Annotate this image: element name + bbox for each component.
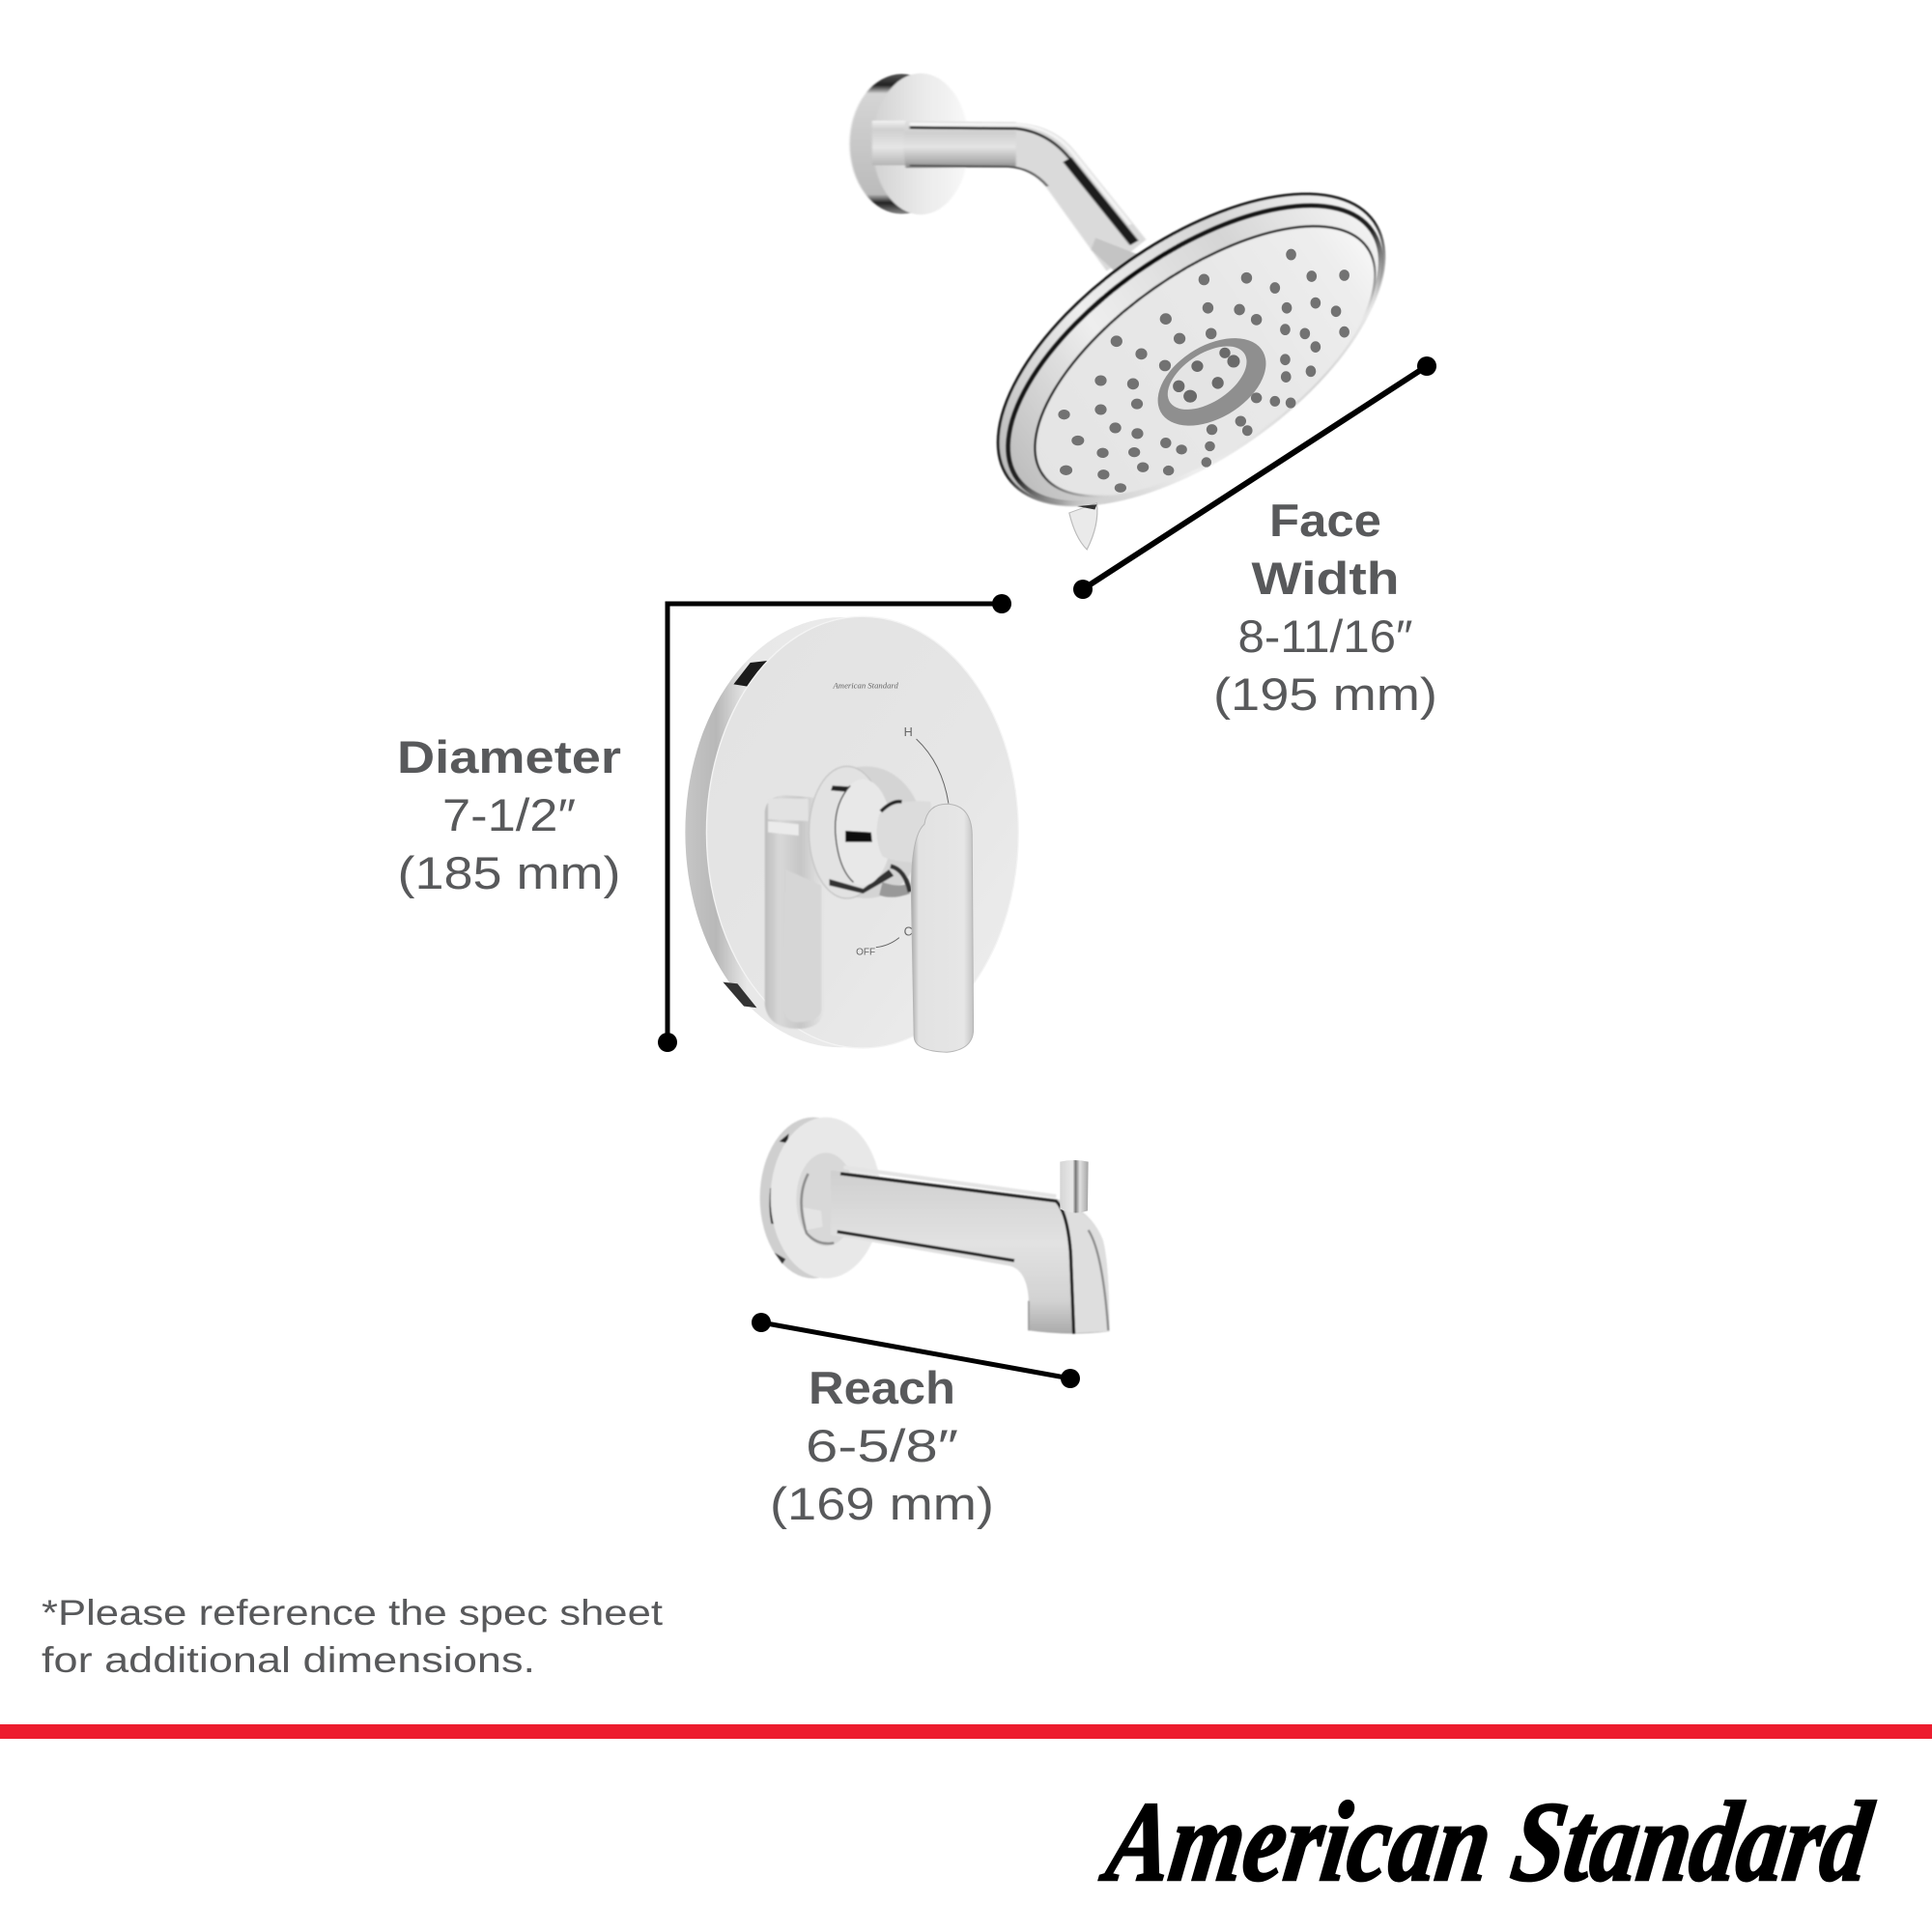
edge reflections: [723, 660, 773, 1008]
diverter pin: [1060, 1160, 1089, 1212]
center spray ring: [1138, 321, 1286, 442]
label: face width: Face: [1269, 495, 1381, 546]
dimension: diameter: [658, 594, 1011, 1052]
footnote: *Please reference the spec sheet: [42, 1593, 664, 1633]
dimension: face width: [1073, 356, 1436, 599]
plate edge: [685, 617, 996, 1047]
footnote: [42, 1593, 664, 1680]
spout flange: [760, 1118, 881, 1278]
front lever: [911, 804, 974, 1052]
plate markings: [833, 681, 949, 958]
label: diameter: [397, 731, 621, 898]
plate markings: H: [904, 725, 913, 739]
plate face: [706, 616, 1018, 1048]
footnote: for additional dimensions.: [42, 1640, 535, 1680]
plate markings: OFF: [856, 948, 875, 958]
label: reach: (169 mm): [770, 1478, 994, 1529]
dimension: reach: [752, 1313, 1080, 1388]
spray nozzles: [1058, 249, 1350, 493]
product: tub spout: [760, 1118, 1109, 1334]
label: reach: 6-5/8″: [806, 1420, 958, 1471]
spout tube: [831, 1167, 1109, 1334]
wall flange and arm: [850, 73, 1146, 271]
label: face width: Width: [1252, 553, 1399, 604]
label: diameter: 7-1/2″: [442, 789, 576, 840]
plate markings: C: [904, 925, 913, 939]
rear handle body: [765, 795, 824, 1029]
label: face width: [1213, 495, 1437, 720]
product: shower head and arm: [850, 73, 1437, 568]
plate markings: American Standard: [833, 681, 898, 691]
label: face width: (195 mm): [1213, 668, 1437, 720]
selector lever: [1069, 503, 1097, 550]
label: diameter: Diameter: [397, 731, 621, 782]
label: face width: 8-11/16″: [1238, 611, 1412, 662]
hub: [809, 766, 931, 898]
label: diameter: (185 mm): [398, 847, 620, 898]
label: reach: Reach: [809, 1362, 955, 1413]
red divider bar: [0, 1724, 1932, 1739]
shower head body: [945, 131, 1437, 568]
product: valve trim plate and handle: [685, 616, 1018, 1052]
label: reach: [770, 1362, 994, 1529]
